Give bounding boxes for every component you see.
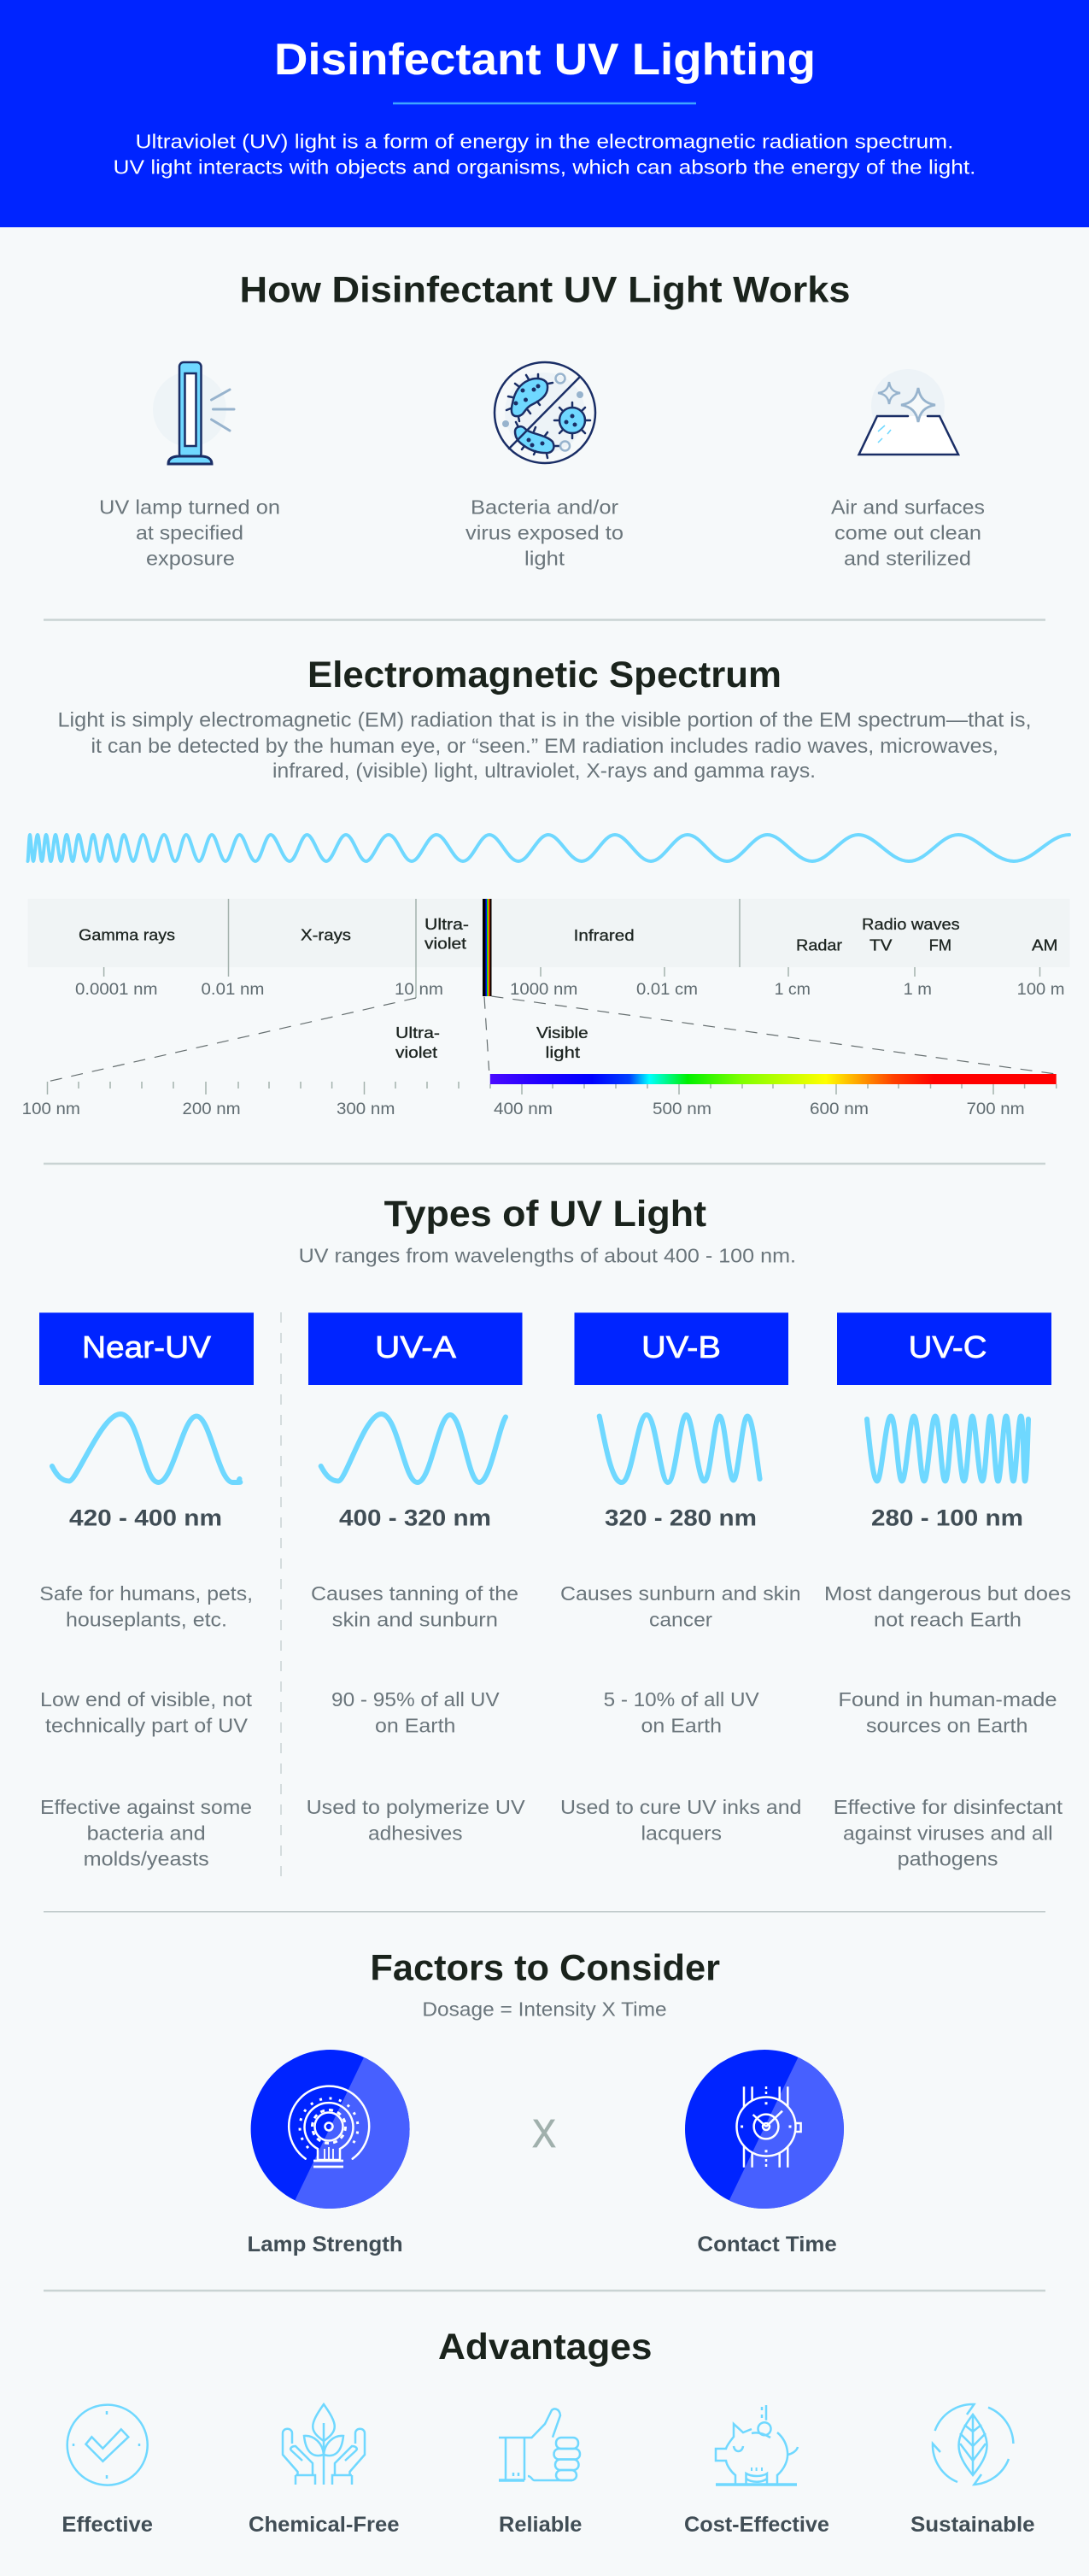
text: Near-UV facts: bacteria and bbox=[87, 1822, 206, 1844]
heading: Electromagnetic Spectrum bbox=[307, 654, 782, 695]
range: 280-100 nm: 280 - 100 nm bbox=[871, 1505, 1023, 1531]
wavelength scale labels: 0.0001 nm bbox=[75, 981, 157, 999]
intro text bbox=[113, 130, 975, 178]
section: types of UV light bbox=[39, 1194, 1071, 1880]
band labels: AM bbox=[1032, 937, 1057, 954]
section: factors to consider bbox=[248, 1947, 861, 2256]
label: ultraviolet: violet bbox=[395, 1044, 437, 1061]
column: UV-A bbox=[307, 1312, 525, 1844]
icon: chemical-free plant in hands bbox=[283, 2404, 365, 2485]
nanometre labels bbox=[22, 1100, 1025, 1118]
box: UV-C bbox=[837, 1312, 1051, 1385]
text: UV-B facts: 5 - 10% of all UV bbox=[604, 1688, 759, 1710]
chart: zoomed ultraviolet and visible scale bbox=[22, 1024, 1057, 1118]
range: 320-280 nm: 320 - 280 nm bbox=[605, 1505, 757, 1531]
text: Near-UV facts: technically part of UV bbox=[45, 1715, 249, 1737]
section: electromagnetic spectrum bbox=[22, 654, 1070, 1118]
label: visible light bbox=[536, 1024, 588, 1061]
wavelength scale labels: 1 cm bbox=[775, 981, 811, 999]
paragraph: Light is simply electromagnetic (EM) radiation that is in the visible portion of the EM spectrum—that is, bbox=[58, 709, 1032, 731]
text: UV-B facts: Used to cure UV inks and bbox=[560, 1796, 801, 1818]
box: Near-UV bbox=[39, 1312, 254, 1385]
text: UV-C facts: pathogens bbox=[898, 1847, 998, 1869]
header banner bbox=[0, 0, 1089, 227]
band labels: Infrared bbox=[574, 927, 635, 944]
text: UV-A facts: Used to polymerize UV bbox=[307, 1796, 525, 1818]
wavelength scale labels: 1000 nm bbox=[510, 981, 577, 999]
text: UV-A facts bbox=[307, 1582, 525, 1844]
labels: advantages: Chemical-Free bbox=[249, 2513, 400, 2537]
label: contact time: Contact Time bbox=[697, 2233, 837, 2256]
intro text: Ultraviolet (UV) light is a form of energy in the electromagnetic radiation spectrum. bbox=[135, 130, 953, 152]
caption: bacteria: Bacteria and/or bbox=[471, 496, 618, 518]
text: UV-B facts: Causes sunburn and skin bbox=[560, 1582, 801, 1605]
heading: Advantages bbox=[438, 2327, 653, 2368]
heading: Types of UV Light bbox=[384, 1194, 706, 1235]
band labels: Gamma rays bbox=[79, 927, 175, 944]
box: Near-UV: Near-UV bbox=[82, 1329, 211, 1364]
text: Near-UV facts: Safe for humans, pets, bbox=[39, 1582, 253, 1605]
band labels: violet bbox=[424, 936, 466, 953]
text: UV-B facts: on Earth bbox=[641, 1715, 722, 1737]
box: UV-B: UV-B bbox=[641, 1329, 721, 1364]
icon: clean surface with sparkles bbox=[858, 369, 959, 455]
nanometre labels: 100 nm bbox=[22, 1100, 80, 1118]
icon: reliable thumbs up bbox=[499, 2409, 580, 2480]
caption: clean surfaces: and sterilized bbox=[844, 547, 971, 569]
box: UV-A: UV-A bbox=[375, 1329, 456, 1364]
band labels: Radio waves bbox=[862, 916, 960, 933]
paragraph: it can be detected by the human eye, or “seen.” EM radiation includes radio waves, microwaves, bbox=[91, 735, 998, 758]
text: UV-C facts: Effective for disinfectant bbox=[834, 1796, 1063, 1818]
paragraph bbox=[58, 709, 1032, 783]
icon: UV lamp bbox=[153, 362, 234, 464]
box: UV-A bbox=[308, 1312, 523, 1385]
wavelength scale labels: 0.01 nm bbox=[202, 981, 265, 999]
text: Near-UV facts: Low end of visible, not bbox=[40, 1688, 253, 1710]
range: 400-320 nm: 400 - 320 nm bbox=[339, 1505, 491, 1531]
paragraph: infrared, (visible) light, ultraviolet, X-rays and gamma rays. bbox=[272, 760, 816, 783]
wave: frequency sweep bbox=[27, 835, 1069, 861]
icon: cost-effective piggy bank bbox=[716, 2405, 798, 2485]
wavelength scale labels: 100 m bbox=[1017, 981, 1064, 999]
text: UV-A facts: Causes tanning of the bbox=[311, 1582, 518, 1605]
range: 420-400 nm: 420 - 400 nm bbox=[69, 1505, 222, 1531]
labels: advantages: Reliable bbox=[499, 2513, 582, 2537]
text: Near-UV facts: Effective against some bbox=[40, 1796, 252, 1818]
icon: bacteria and virus crossed out bbox=[495, 362, 595, 463]
wavelength scale labels: 10 nm bbox=[395, 981, 443, 999]
formula: Dosage = Intensity X Time bbox=[422, 1998, 667, 2020]
text: UV-C facts: sources on Earth bbox=[866, 1715, 1028, 1737]
band labels: Ultra- bbox=[424, 916, 469, 933]
wave: UV-B bbox=[600, 1415, 760, 1482]
visible colour gradient bar bbox=[490, 1074, 1057, 1084]
icon: effective checkmark bbox=[67, 2405, 148, 2485]
text: UV-C facts bbox=[824, 1582, 1071, 1869]
heading: Factors to Consider bbox=[370, 1947, 720, 1988]
band labels bbox=[79, 916, 1057, 954]
text: UV-A facts: on Earth bbox=[375, 1715, 455, 1737]
text: UV-B facts: cancer bbox=[649, 1608, 712, 1630]
caption: bacteria: light bbox=[524, 547, 565, 569]
text: UV-A facts: skin and sunburn bbox=[332, 1608, 498, 1630]
band labels: FM bbox=[929, 937, 951, 954]
chart: electromagnetic spectrum band bbox=[27, 899, 1069, 999]
caption: clean surfaces bbox=[831, 496, 985, 569]
column: UV-C bbox=[824, 1312, 1071, 1869]
section: how disinfectant UV light works bbox=[99, 270, 985, 569]
labels: advantages: Cost-Effective bbox=[684, 2513, 829, 2537]
text: UV-C facts: against viruses and all bbox=[843, 1822, 1053, 1844]
caption: bacteria: virus exposed to bbox=[465, 521, 624, 543]
caption: UV lamp: exposure bbox=[146, 547, 235, 569]
multiply sign: X bbox=[532, 2111, 556, 2156]
caption: UV lamp: at specified bbox=[136, 521, 243, 543]
wave: UV-C bbox=[867, 1417, 1028, 1482]
caption: UV lamp: UV lamp turned on bbox=[99, 496, 280, 518]
caption: bacteria bbox=[465, 496, 624, 569]
nanometre labels: 700 nm bbox=[967, 1100, 1025, 1118]
intro text: UV light interacts with objects and organisms, which can absorb the energy of the light. bbox=[113, 155, 975, 178]
text: UV-C facts: not reach Earth bbox=[874, 1608, 1022, 1630]
subheading: UV ranges from wavelengths of about 400 - 100 nm. bbox=[299, 1244, 796, 1266]
caption: clean surfaces: Air and surfaces bbox=[831, 496, 985, 518]
labels: advantages bbox=[61, 2513, 1035, 2537]
caption: UV lamp bbox=[99, 496, 280, 569]
icon: contact time watch bbox=[685, 2050, 844, 2209]
band labels: X-rays bbox=[301, 927, 351, 944]
text: UV-B facts: lacquers bbox=[641, 1822, 722, 1844]
labels: advantages: Effective bbox=[61, 2513, 153, 2537]
label: lamp strength: Lamp Strength bbox=[248, 2233, 403, 2256]
wavelength scale labels: 1 m bbox=[904, 981, 932, 999]
caption: clean surfaces: come out clean bbox=[834, 521, 981, 543]
icon: lamp strength bbox=[251, 2050, 410, 2209]
band labels: TV bbox=[869, 937, 892, 954]
section: advantages bbox=[61, 2327, 1035, 2537]
box: UV-C: UV-C bbox=[909, 1329, 987, 1364]
text: UV-A facts: adhesives bbox=[368, 1822, 463, 1844]
text: UV-C facts: Most dangerous but does bbox=[824, 1582, 1071, 1605]
label: visible light: Visible bbox=[536, 1024, 588, 1042]
text: UV-A facts: 90 - 95% of all UV bbox=[331, 1688, 500, 1710]
nanometre labels: 200 nm bbox=[183, 1100, 241, 1118]
label: visible light: light bbox=[545, 1044, 580, 1061]
heading: How Disinfectant UV Light Works bbox=[239, 270, 851, 311]
nanometre labels: 600 nm bbox=[810, 1100, 869, 1118]
text: UV-C facts: Found in human-made bbox=[838, 1688, 1057, 1710]
icon: sustainable leaf cycle bbox=[933, 2404, 1013, 2485]
box: UV-B bbox=[574, 1312, 788, 1385]
wave: Near-UV bbox=[52, 1414, 240, 1482]
title: Disinfectant UV Lighting bbox=[274, 35, 816, 85]
column: UV-B bbox=[560, 1312, 801, 1844]
wavelength scale labels bbox=[75, 981, 1064, 999]
text: UV-B facts bbox=[560, 1582, 801, 1844]
nanometre labels: 400 nm bbox=[494, 1100, 553, 1118]
wave: UV-A bbox=[321, 1414, 506, 1482]
label: ultraviolet: Ultra- bbox=[395, 1024, 440, 1042]
nanometre labels: 500 nm bbox=[653, 1100, 711, 1118]
text: Near-UV facts: houseplants, etc. bbox=[66, 1608, 227, 1630]
text: Near-UV facts: molds/yeasts bbox=[84, 1847, 209, 1869]
label: ultraviolet bbox=[395, 1024, 440, 1061]
text: Near-UV facts bbox=[39, 1582, 253, 1869]
wavelength scale labels: 0.01 cm bbox=[636, 981, 698, 999]
nanometre labels: 300 nm bbox=[337, 1100, 395, 1118]
column: Near-UV bbox=[39, 1312, 254, 1869]
labels: advantages: Sustainable bbox=[910, 2513, 1035, 2537]
band labels: Radar bbox=[796, 937, 842, 954]
